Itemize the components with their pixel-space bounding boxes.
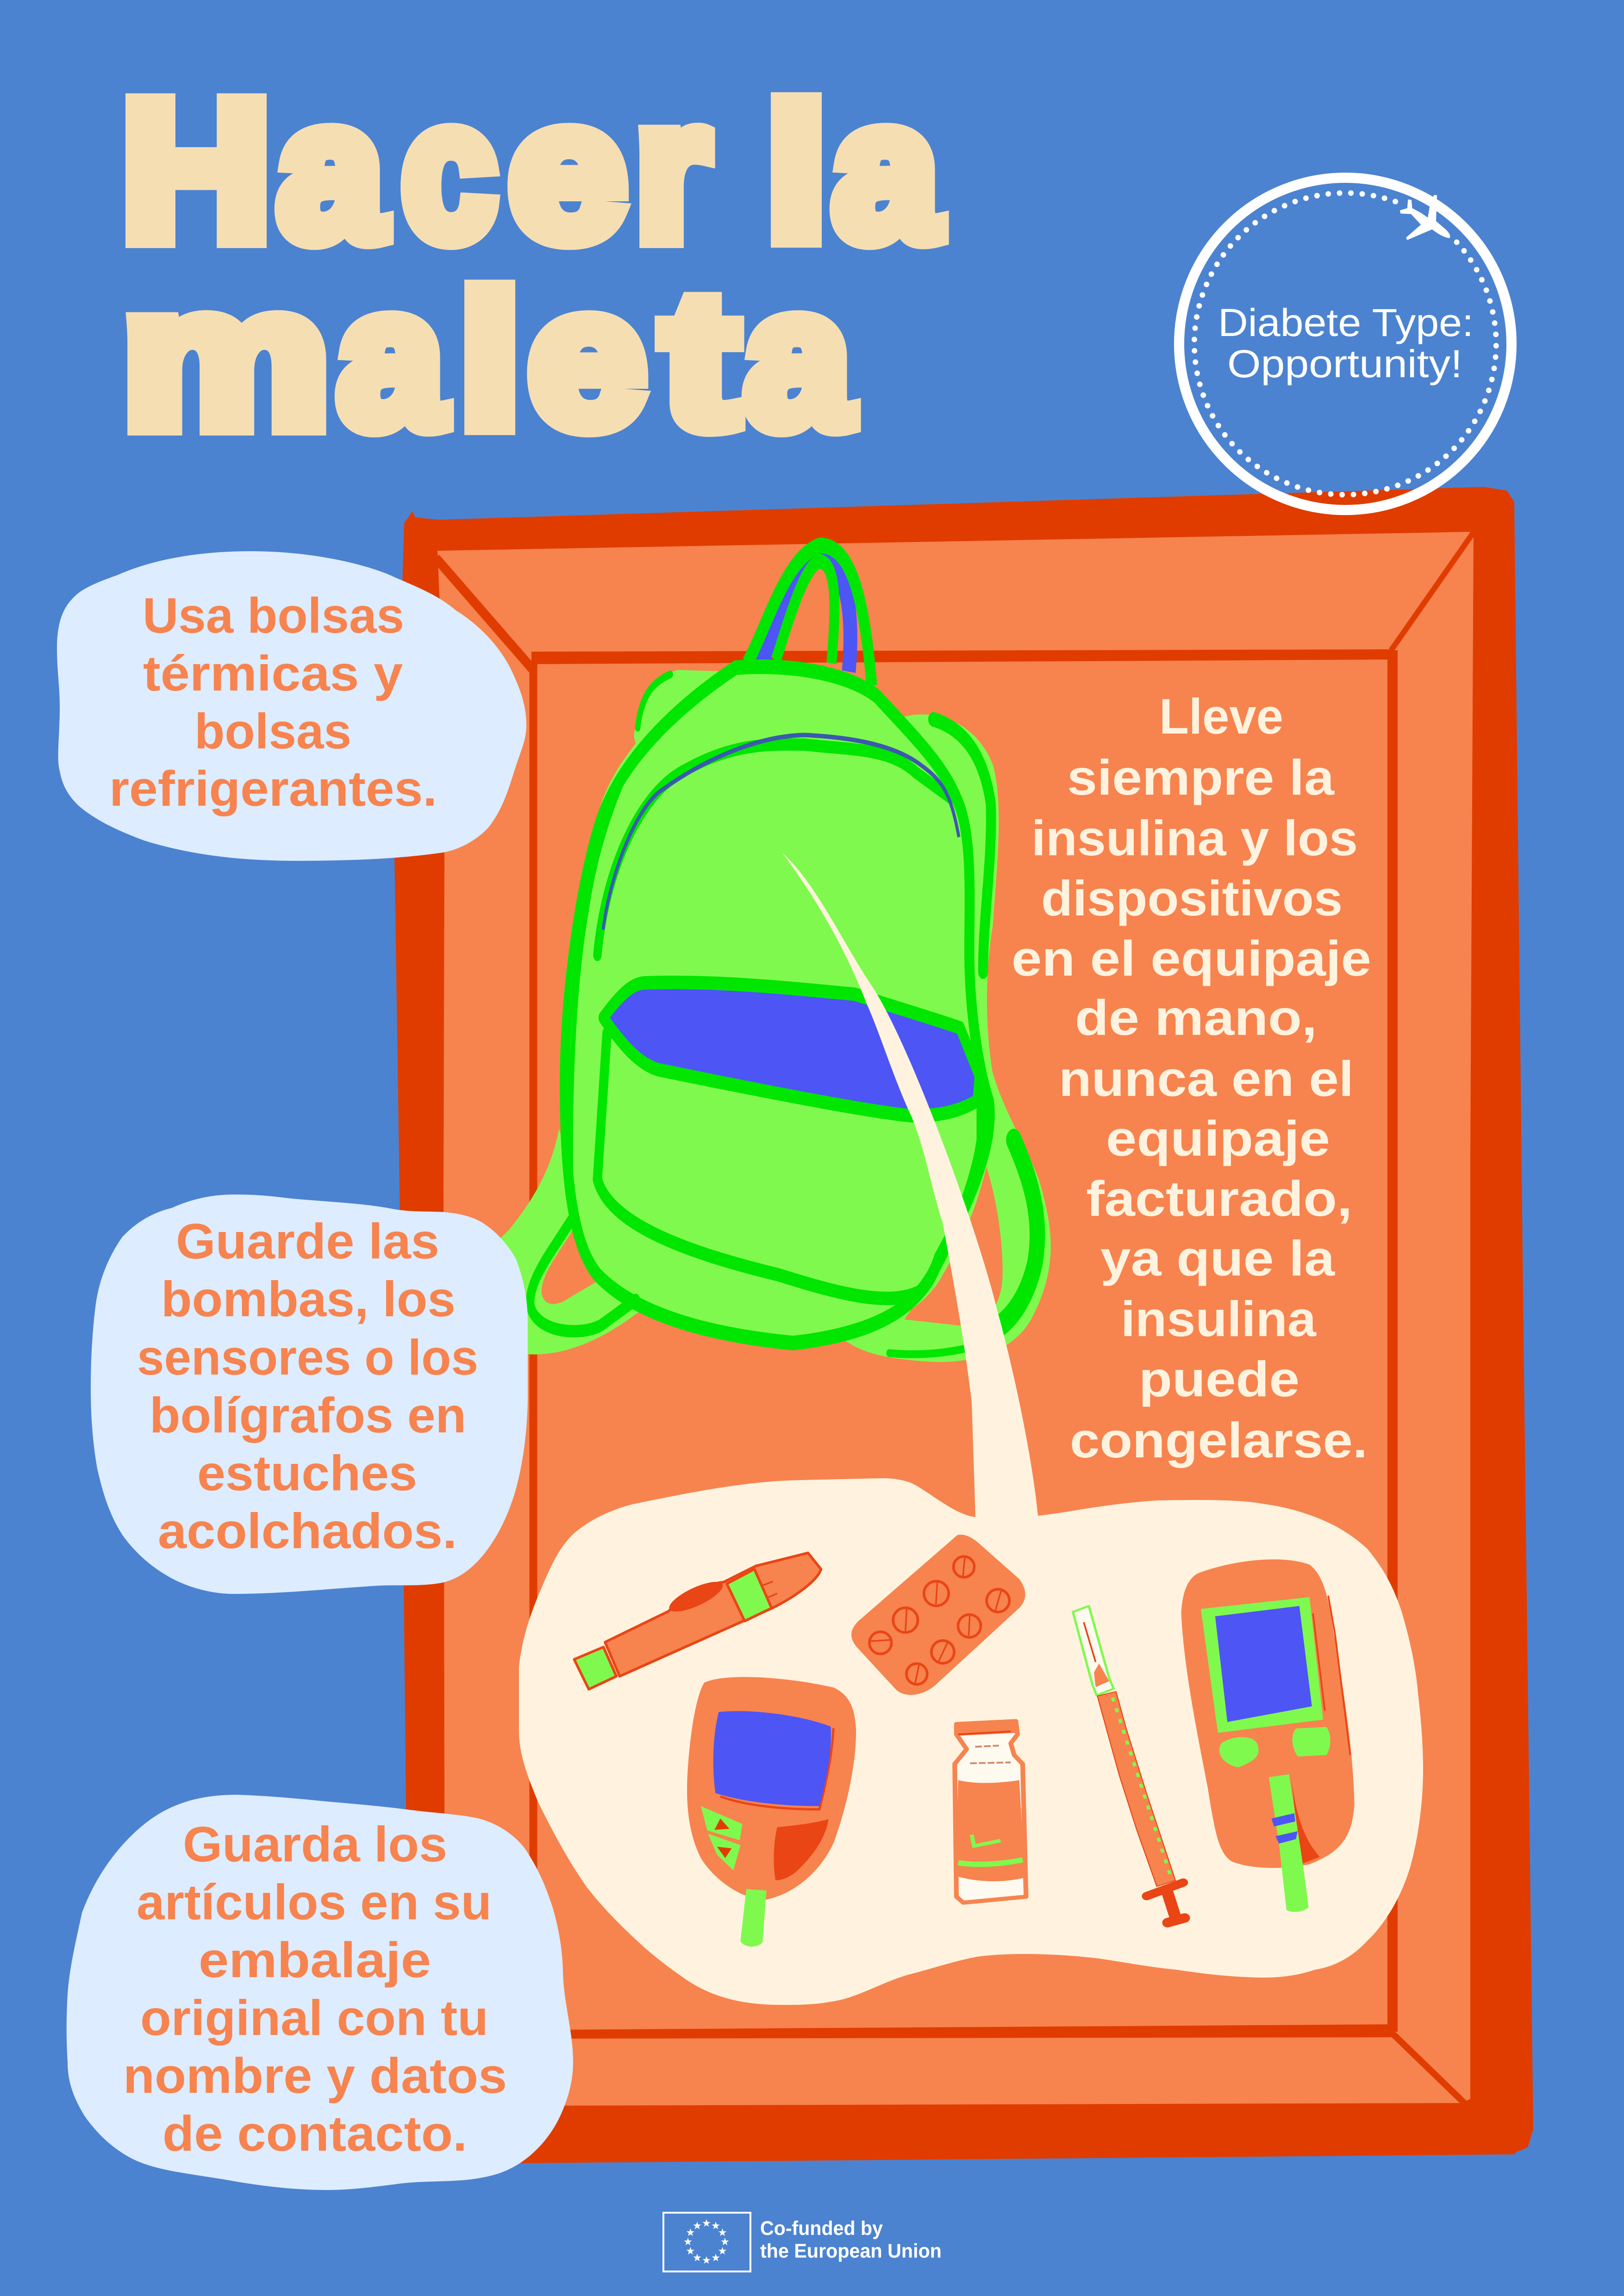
icon: insulin syringe [1073, 1606, 1185, 1923]
panel: tip bubble original packaging: nombre y datos [123, 2047, 507, 2103]
panel: tip bubble original packaging: Guarda los [183, 1816, 447, 1872]
panel: tip bubble padded cases: estuches [197, 1445, 417, 1501]
text block: carry-on advice [1012, 688, 1371, 1468]
text block: carry-on advice: insulina [1121, 1291, 1317, 1347]
text block: carry-on advice: ya que la [1100, 1230, 1335, 1286]
items: lancing pen, pill blister, glucose meter [574, 1535, 1025, 1947]
text block: carry-on advice: de mano, [1075, 989, 1317, 1045]
panel: tip bubble original packaging: original con tu [140, 1990, 488, 2046]
backpack outlines [530, 667, 1037, 1354]
panel: tip bubble thermal bags: Usa bolsas [143, 587, 404, 643]
backpack zipper [603, 735, 959, 930]
text block: carry-on advice: siempre la [1067, 749, 1335, 805]
backpack blue pocket [603, 983, 979, 1116]
icon: airplane [1400, 195, 1450, 240]
title: Hacer la maleta: a [833, 61, 939, 280]
text block: carry-on advice: equipaje [1106, 1110, 1330, 1166]
badge: Diabete Type Opportunity: Diabete Type: [1218, 301, 1474, 344]
panel: tip bubble padded cases: Guarde las [176, 1213, 439, 1269]
icon: pill blister [851, 1535, 1025, 1695]
text block: carry-on advice: insulina y los [1031, 810, 1358, 866]
icon: glucose meter two [1181, 1559, 1355, 1912]
panel: tip bubble padded cases: acolchados. [158, 1503, 457, 1559]
panel: tip bubble padded cases: bolígrafos en [150, 1387, 466, 1443]
panel: tip bubble thermal bags: bolsas [194, 703, 351, 759]
title: Hacer la maleta: l [767, 67, 826, 279]
title: Hacer la maleta: r [636, 61, 709, 280]
backpack handle [747, 545, 872, 685]
backpack body [561, 666, 994, 1346]
text block: carry-on advice: puede [1139, 1351, 1299, 1407]
panel: tip bubble padded cases [91, 1195, 528, 1594]
panel: tip bubble padded cases: sensores o los [137, 1329, 478, 1385]
text block: carry-on advice: facturado, [1086, 1170, 1352, 1226]
panel: tip bubble original packaging: de contacto. [162, 2105, 467, 2161]
items: vial, syringe, glucose meter with strip [955, 1559, 1355, 1923]
logo: co-funded by the European Union: the European Union [760, 2240, 942, 2262]
text block: carry-on advice: Lleve [1159, 688, 1283, 744]
badge: Diabete Type Opportunity: Opportunity! [1227, 342, 1462, 386]
panel: suitcase frame [394, 487, 1533, 2166]
panel: tip bubble padded cases: bombas, los [161, 1271, 456, 1327]
text block: carry-on advice: dispositivos [1041, 870, 1343, 926]
panel: tip bubble thermal bags: térmicas y [143, 645, 403, 701]
title: Hacer la maleta: H [122, 61, 270, 280]
callout blob with pointer [519, 853, 1423, 2005]
title: Hacer la maleta: a [278, 61, 384, 280]
title: Hacer la maleta: a [745, 248, 851, 468]
title: Hacer la maleta: t [663, 254, 737, 467]
text block: carry-on advice: nunca en el [1059, 1051, 1354, 1107]
title: Hacer la maleta: c [402, 60, 496, 280]
icon: glucose meter one [687, 1677, 856, 1947]
logo: co-funded by the European Union: Co-funded by [760, 2217, 883, 2240]
logo: co-funded by the European Union [663, 2213, 942, 2271]
text block: carry-on advice: en el equipaje [1012, 930, 1371, 986]
backpack straps [486, 670, 1051, 1362]
panel: tip bubble thermal bags: refrigerantes. [109, 760, 437, 816]
icon: insulin vial [955, 1721, 1026, 1903]
panel: tip bubble original packaging: embalaje [199, 1932, 431, 1988]
title: Hacer la maleta: m [123, 248, 329, 468]
title: Hacer la maleta: e [510, 61, 625, 280]
title: Hacer la maleta: l [460, 255, 520, 466]
panel: tip bubble original packaging: artículos en su [137, 1874, 492, 1930]
panel: tip bubble original packaging [67, 1795, 573, 2190]
title: Hacer la maleta: a [338, 248, 444, 468]
backpack illustration [486, 545, 1051, 1362]
badge: Diabete Type Opportunity [1179, 178, 1512, 510]
panel: tip bubble thermal bags [57, 551, 526, 861]
text block: carry-on advice: congelarse. [1070, 1412, 1368, 1468]
title: Hacer la maleta: e [529, 248, 645, 467]
icon: lancing pen [574, 1553, 821, 1689]
icon: EU flag [663, 2213, 750, 2271]
title: Hacer la maleta [122, 60, 939, 468]
